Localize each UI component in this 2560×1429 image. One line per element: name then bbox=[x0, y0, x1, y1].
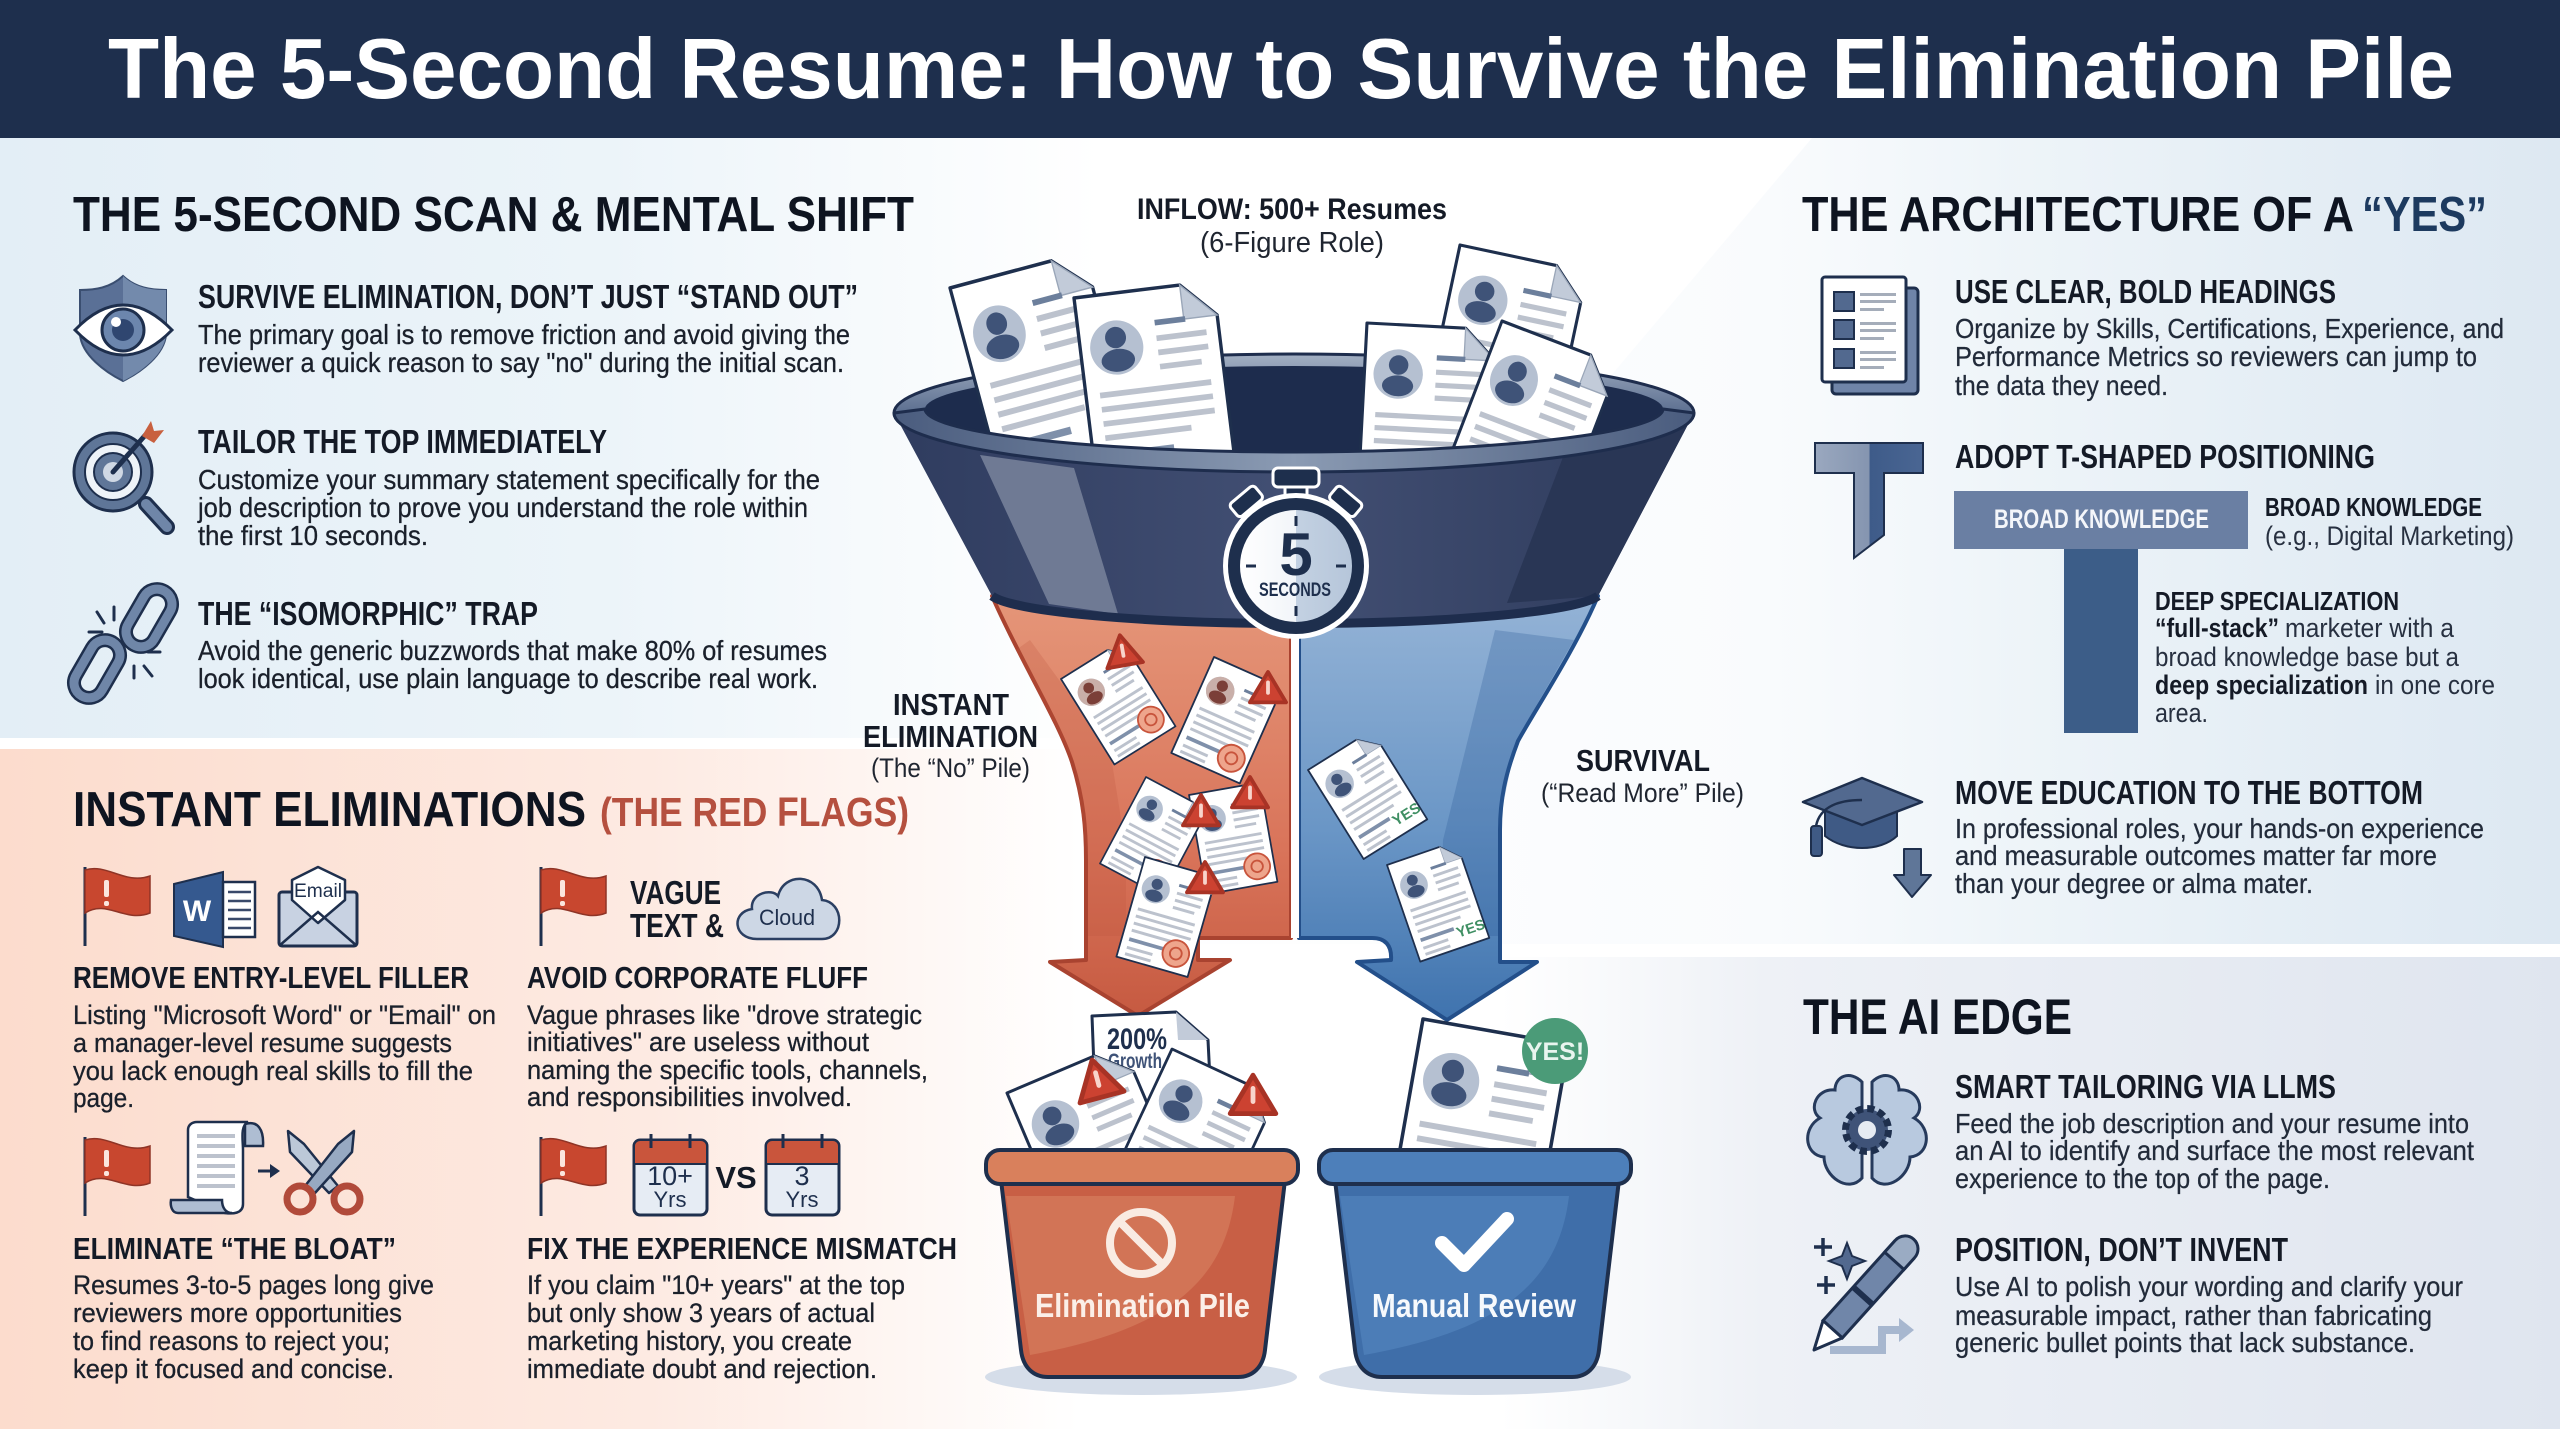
icon: flag and experience calendars: Yrs bbox=[786, 1187, 818, 1212]
stopwatch: 5 seconds: SECONDS bbox=[1259, 580, 1331, 601]
heading: instant eliminations: INSTANT ELIMINATIONS bbox=[73, 783, 586, 837]
annotation: deep specialization: in one core bbox=[2375, 670, 2495, 700]
panel: the 5-second scan and mental shift bbox=[69, 188, 914, 703]
annotation: deep specialization bbox=[2155, 586, 2495, 728]
item body: clear headings: Performance Metrics so reviewers can jump to bbox=[1955, 341, 2477, 372]
sub-item body: avoid corporate fluff bbox=[527, 1000, 928, 1112]
falling surviving resumes bbox=[1308, 730, 1490, 962]
falling surviving resumes: YES bbox=[1454, 917, 1488, 941]
sub-item body: remove entry-level filler: page. bbox=[73, 1083, 134, 1113]
bucket: elimination pile: Growth bbox=[1108, 1050, 1162, 1073]
item body: isomorphic trap: Avoid the generic buzzwords that make 80% of resumes bbox=[198, 635, 827, 666]
label: instant elimination bbox=[863, 687, 1038, 783]
sub-item body: eliminate the bloat: Resumes 3-to-5 pages long give bbox=[73, 1270, 434, 1300]
sub-item heading: fix the experience mismatch: FIX THE EXPERIENCE MISMATCH bbox=[527, 1231, 957, 1266]
sub-item body: fix the experience mismatch: immediate doubt and rejection. bbox=[527, 1354, 877, 1384]
panel: the AI edge bbox=[1803, 989, 2474, 1359]
label: survival: (“Read More” Pile) bbox=[1541, 778, 1744, 808]
sub-item body: remove entry-level filler: you lack enough real skills to fill the bbox=[73, 1056, 473, 1086]
bucket: manual review: YES! bbox=[1526, 1038, 1584, 1066]
item body: tailor the top: the first 10 seconds. bbox=[198, 520, 428, 551]
item body: survive elimination: reviewer a quick reason to say "no" during the initial scan. bbox=[198, 347, 844, 378]
item body: position don't invent: generic bullet points that lack substance. bbox=[1955, 1327, 2415, 1358]
item body: survive elimination: The primary goal is to remove friction and avoid giving the bbox=[198, 319, 850, 350]
icon: document with sections bbox=[1822, 277, 1918, 394]
sub-item body: remove entry-level filler: Listing "Microsoft Word" or "Email" on bbox=[73, 1000, 496, 1030]
annotation: deep specialization: area. bbox=[2155, 698, 2208, 728]
icon: flag and experience calendars: 3 bbox=[794, 1161, 810, 1191]
label: survival: SURVIVAL bbox=[1576, 743, 1710, 778]
icon: flag, vague text and cloud: VAGUE bbox=[630, 874, 721, 911]
annotation: deep specialization: marketer with a bbox=[2285, 613, 2455, 643]
sub-item body: eliminate the bloat: to find reasons to reject you; bbox=[73, 1326, 390, 1356]
item body: move education: In professional roles, your hands-on experience bbox=[1955, 813, 2484, 844]
sub-item body: fix the experience mismatch: If you claim "10+ years" at the top bbox=[527, 1270, 905, 1300]
label: instant elimination: INSTANT bbox=[893, 687, 1009, 722]
T-shaped diagram: BROAD KNOWLEDGE bbox=[1994, 504, 2209, 534]
sub-item body: avoid corporate fluff: Vague phrases like "drove strategic bbox=[527, 1000, 922, 1030]
item heading: clear headings: USE CLEAR, BOLD HEADINGS bbox=[1955, 273, 2336, 310]
sub-item body: avoid corporate fluff: and responsibilities involved. bbox=[527, 1082, 852, 1112]
icon: flag and experience calendars: VS bbox=[715, 1160, 757, 1195]
item body: smart tailoring: an AI to identify and surface the most relevant bbox=[1955, 1135, 2474, 1166]
background panel: red flags bbox=[0, 749, 1080, 1429]
item body: survive elimination bbox=[198, 319, 850, 378]
icon: flag, vague text and cloud: Cloud bbox=[759, 905, 815, 930]
label: inflow: INFLOW: 500+ Resumes bbox=[1137, 193, 1447, 226]
item heading: tailor the top: TAILOR THE TOP IMMEDIATELY bbox=[198, 423, 607, 460]
icon: pen with sparkles bbox=[1804, 1231, 1923, 1359]
funnel: red elimination channel bbox=[992, 596, 1291, 1016]
item body: move education: than your degree or alma mater. bbox=[1955, 868, 2313, 899]
funnel diagram bbox=[894, 245, 1694, 1020]
sub-item heading: remove entry-level filler: REMOVE ENTRY-LEVEL FILLER bbox=[73, 960, 469, 995]
sub-item body: fix the experience mismatch bbox=[527, 1270, 905, 1384]
annotation: deep specialization: broad knowledge base but a bbox=[2155, 642, 2460, 672]
item body: clear headings: the data they need. bbox=[1955, 370, 2168, 401]
item body: tailor the top: Customize your summary statement specifically for the bbox=[198, 464, 820, 495]
funnel: dark upper band bbox=[894, 409, 1694, 624]
bucket: elimination pile: Elimination Pile bbox=[1035, 1287, 1250, 1324]
annotation: broad knowledge: (e.g., Digital Marketing) bbox=[2265, 521, 2514, 551]
item body: position don't invent: Use AI to polish your wording and clarify your bbox=[1955, 1271, 2463, 1302]
item body: position don't invent: measurable impact, rather than fabricating bbox=[1955, 1300, 2432, 1331]
sub-item body: eliminate the bloat: keep it focused and concise. bbox=[73, 1354, 394, 1384]
icon: flag, word and email: Email bbox=[294, 881, 342, 902]
label: survival bbox=[1541, 743, 1744, 808]
item body: clear headings: Organize by Skills, Certifications, Experience, and bbox=[1955, 313, 2504, 344]
icon: target with magnifier bbox=[74, 421, 167, 527]
annotation: deep specialization: deep specialization bbox=[2155, 670, 2368, 700]
resumes entering the funnel bbox=[950, 245, 1619, 542]
heading: architecture of a yes: THE ARCHITECTURE OF A bbox=[1802, 188, 2354, 242]
item heading: t-shaped positioning: ADOPT T-SHAPED POSITIONING bbox=[1955, 438, 2375, 475]
item body: smart tailoring: Feed the job description and your resume into bbox=[1955, 1108, 2469, 1139]
bucket: manual review: Manual Review bbox=[1372, 1287, 1576, 1324]
item heading: move education: MOVE EDUCATION TO THE BOTTOM bbox=[1955, 774, 2423, 811]
heading: 5-second scan: THE 5-SECOND SCAN & MENTAL SHIFT bbox=[73, 188, 914, 242]
stopwatch: 5 seconds bbox=[1223, 468, 1369, 639]
title banner bbox=[0, 0, 2560, 138]
annotation: deep specialization: “full-stack” bbox=[2155, 613, 2279, 643]
sub-item body: remove entry-level filler: a manager-level resume suggests bbox=[73, 1028, 452, 1058]
item body: tailor the top: job description to prove you understand the role within bbox=[197, 492, 808, 523]
sub-item body: remove entry-level filler bbox=[73, 1000, 496, 1113]
item body: position don't invent bbox=[1955, 1271, 2463, 1358]
item heading: isomorphic trap: THE “ISOMORPHIC” TRAP bbox=[198, 595, 538, 632]
icon: flag, scroll and scissors bbox=[85, 1122, 360, 1216]
item heading: survive elimination: SURVIVE ELIMINATION, DON’T JUST “STAND OUT” bbox=[198, 278, 858, 315]
icon: shield with eye bbox=[75, 276, 172, 381]
background panel: 5-second scan bbox=[0, 138, 1100, 738]
icon: letter T bbox=[1815, 443, 1923, 558]
sub-item body: fix the experience mismatch: but only show 3 years of actual bbox=[527, 1298, 875, 1328]
label: inflow: (6-Figure Role) bbox=[1200, 227, 1384, 259]
bucket: manual review bbox=[1319, 1018, 1631, 1395]
icon: graduation cap with down arrow bbox=[1803, 778, 1931, 897]
sub-item heading: eliminate the bloat: ELIMINATE “THE BLOAT” bbox=[73, 1231, 396, 1266]
item body: isomorphic trap bbox=[198, 635, 827, 694]
item body: tailor the top bbox=[197, 464, 820, 551]
annotation: deep specialization: DEEP SPECIALIZATION bbox=[2155, 586, 2399, 616]
icon: flag, vague text and cloud bbox=[541, 867, 839, 946]
sub-item heading: avoid corporate fluff: AVOID CORPORATE FLUFF bbox=[527, 960, 868, 995]
heading: AI edge: THE AI EDGE bbox=[1803, 989, 2072, 1045]
label: instant elimination: ELIMINATION bbox=[863, 719, 1038, 754]
item body: clear headings bbox=[1955, 313, 2504, 401]
icon: brain with gear bbox=[1808, 1076, 1926, 1184]
stopwatch: 5 seconds: 5 bbox=[1279, 521, 1313, 588]
item body: smart tailoring bbox=[1955, 1108, 2474, 1194]
item heading: position don't invent: POSITION, DON’T INVENT bbox=[1955, 1231, 2288, 1268]
falling rejected resumes bbox=[1061, 632, 1286, 977]
item body: move education: and measurable outcomes matter far more bbox=[1955, 840, 2437, 871]
annotation: broad knowledge: BROAD KNOWLEDGE bbox=[2265, 492, 2482, 522]
background panel: architecture bbox=[1130, 138, 2560, 944]
icon: flag, vague text and cloud: TEXT & bbox=[630, 907, 724, 944]
falling surviving resumes: YES bbox=[1389, 799, 1424, 830]
annotation: broad knowledge bbox=[2265, 492, 2514, 551]
panel: the architecture of a yes bbox=[1802, 188, 2514, 899]
icon: flag, word and email: W bbox=[183, 895, 212, 928]
icon: flag and experience calendars: Yrs bbox=[654, 1187, 686, 1212]
icon: flag, word and email bbox=[85, 867, 357, 947]
heading: architecture of a yes: “YES” bbox=[2362, 188, 2487, 242]
title banner: The 5-Second Resume: How to Survive the Elimination Pile bbox=[108, 22, 2454, 117]
sub-item body: eliminate the bloat bbox=[73, 1270, 434, 1384]
T-shaped diagram bbox=[1954, 491, 2248, 733]
funnel: blue survival channel bbox=[1299, 596, 1598, 1020]
funnel: rim and interior bbox=[894, 354, 1694, 472]
heading: instant eliminations: (THE RED FLAGS) bbox=[600, 789, 909, 835]
item heading: smart tailoring: SMART TAILORING VIA LLMS bbox=[1955, 1068, 2336, 1105]
heading: instant eliminations bbox=[73, 783, 909, 837]
item body: smart tailoring: experience to the top of the page. bbox=[1955, 1163, 2330, 1194]
item body: isomorphic trap: look identical, use plain language to describe real work. bbox=[198, 663, 818, 694]
sub-item body: avoid corporate fluff: naming the specific tools, channels, bbox=[527, 1055, 928, 1085]
item body: move education bbox=[1955, 813, 2484, 899]
panel: instant eliminations, the red flags bbox=[73, 783, 957, 1384]
sub-item body: eliminate the bloat: reviewers more opportunities bbox=[73, 1298, 402, 1328]
bucket: elimination pile bbox=[985, 1012, 1298, 1395]
label: instant elimination: (The “No” Pile) bbox=[871, 753, 1030, 783]
icon: flag and experience calendars: 10+ bbox=[647, 1161, 693, 1191]
sub-item body: avoid corporate fluff: initiatives" are useless without bbox=[527, 1027, 869, 1057]
icon: broken chain bbox=[69, 584, 177, 703]
bucket: elimination pile: 200% bbox=[1107, 1023, 1167, 1056]
sub-item body: fix the experience mismatch: marketing history, you create bbox=[527, 1326, 852, 1356]
divider between channels bbox=[1291, 620, 1299, 938]
label: inflow bbox=[1137, 193, 1447, 259]
background panel: AI edge bbox=[1500, 957, 2560, 1429]
icon: flag and experience calendars bbox=[541, 1134, 839, 1216]
